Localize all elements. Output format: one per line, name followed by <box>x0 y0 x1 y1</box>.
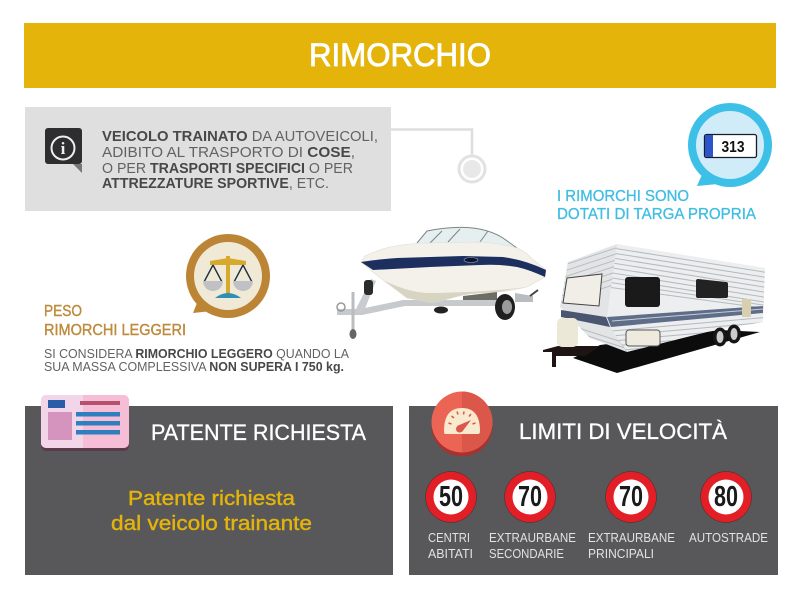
licence note: dal veicolo trainante <box>111 513 312 535</box>
road type labels: CENTRI <box>428 530 470 545</box>
title banner <box>24 23 776 88</box>
road type labels <box>428 530 768 561</box>
speed sign: 70 secondary <box>504 472 556 522</box>
road type labels: SECONDARIE <box>489 546 564 561</box>
weight text <box>44 346 349 374</box>
icon: speedometer <box>432 392 492 456</box>
panel: required licence <box>25 395 393 575</box>
road type labels: PRINCIPALI <box>588 546 654 561</box>
icon: info speech bubble <box>45 128 82 173</box>
licence note: Patente richiesta <box>128 488 296 510</box>
icon: licence card <box>41 395 129 451</box>
weight heading: RIMORCHI LEGGERI <box>44 322 186 339</box>
road type labels: ABITATI <box>428 546 473 561</box>
speed sign: 80 motorway: 80 <box>714 481 738 513</box>
definition text: O PER TRASPORTI SPECIFICI O PER <box>102 160 353 177</box>
panel: definition <box>25 107 391 211</box>
plate caption: I RIMORCHI SONO <box>557 188 689 205</box>
speed sign: 50 urban <box>426 472 476 522</box>
weight heading <box>44 303 186 339</box>
icon: info speech bubble: i <box>61 139 66 158</box>
speed sign: 80 motorway <box>700 472 752 522</box>
definition text: ATTREZZATURE SPORTIVE, ETC. <box>102 175 329 192</box>
speed sign: 70 main: 70 <box>619 481 643 513</box>
speed sign: 70 secondary: 70 <box>518 481 542 513</box>
speed sign: 50 urban: 50 <box>439 481 463 513</box>
weight text: SI CONSIDERA RIMORCHIO LEGGERO QUANDO LA <box>44 346 349 361</box>
panel heading: LIMITI DI VELOCITÀ <box>519 419 727 444</box>
plate caption: DOTATI DI TARGA PROPRIA <box>557 206 757 223</box>
definition text: ADIBITO AL TRASPORTO DI COSE, <box>102 144 355 161</box>
illustration: boat on trailer <box>337 227 546 339</box>
weight heading: PESO <box>44 303 82 320</box>
road type labels: EXTRAURBANE <box>489 530 576 545</box>
title banner: RIMORCHIO <box>309 37 491 73</box>
panel: speed limits <box>409 392 778 575</box>
connector line with node <box>391 130 485 182</box>
definition text: VEICOLO TRAINATO DA AUTOVEICOLI, <box>102 128 378 145</box>
icon: weighing scale badge <box>186 234 270 318</box>
icon: license plate badge: 313 <box>722 139 745 156</box>
illustration: caravan <box>543 244 770 373</box>
plate caption <box>557 188 757 223</box>
weight text: SUA MASSA COMPLESSIVA NON SUPERA I 750 kg. <box>44 359 344 374</box>
licence note <box>111 488 312 535</box>
road type labels: EXTRAURBANE <box>588 530 675 545</box>
speed sign: 70 main <box>606 472 656 522</box>
definition text <box>102 128 378 192</box>
icon: license plate badge <box>688 103 772 187</box>
panel heading: PATENTE RICHIESTA <box>151 420 366 445</box>
road type labels: AUTOSTRADE <box>689 530 768 545</box>
